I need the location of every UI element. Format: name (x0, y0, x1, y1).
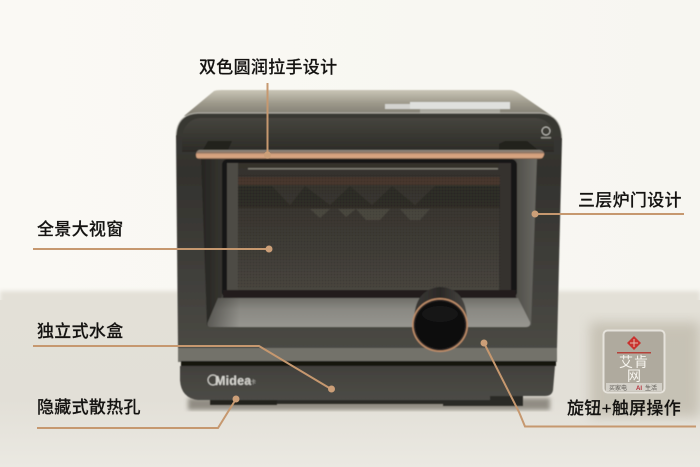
watermark logo: 网 (627, 368, 641, 384)
window mesh (238, 175, 500, 289)
watermark brand text: 艾肯 (619, 354, 649, 370)
watermark logo (604, 330, 664, 392)
door lower bevel (208, 298, 530, 327)
watermark tagline (606, 383, 662, 391)
base (180, 366, 555, 400)
label: vents: 隐藏式散热孔 (37, 398, 141, 417)
watermark logo: 买家电 (609, 384, 627, 392)
label: water box: 独立式水盒 (37, 322, 124, 341)
callout dots (232, 152, 538, 402)
brand logo: 凯卡 (245, 378, 257, 386)
black gap (181, 361, 556, 366)
window reflections (238, 186, 500, 208)
line: water box (33, 346, 331, 389)
label: door: 三层炉门设计 (578, 191, 682, 210)
lower front band (178, 348, 557, 362)
label: window: 全景大视窗 (37, 219, 124, 239)
watermark logo: 生活 (645, 384, 657, 392)
door side left (201, 158, 222, 326)
line: door (535, 213, 684, 215)
door side right (512, 158, 537, 326)
brand logo: Midea (215, 374, 252, 388)
handle recess left (203, 141, 232, 150)
oven top face (184, 90, 552, 116)
line: vents (37, 399, 236, 428)
handle (196, 150, 544, 159)
callout lines (33, 83, 696, 428)
knob (412, 287, 468, 352)
energy mark (541, 127, 551, 138)
line: handle (266, 83, 268, 155)
line: knob (484, 343, 696, 426)
label: handle: 双色圆润拉手设计 (199, 57, 337, 77)
oven feet (210, 392, 523, 406)
window glass (222, 159, 517, 298)
watermark diamond (627, 336, 641, 350)
top face label sticker (385, 102, 510, 113)
upper front panel (182, 118, 554, 152)
watermark logo: AI (636, 386, 642, 392)
handle recess right (499, 141, 538, 150)
front body (176, 113, 562, 348)
label: knob: 旋钮+触屏操作 (567, 399, 681, 418)
oven (176, 90, 562, 410)
oven shadow (188, 398, 550, 410)
line: window (33, 248, 269, 250)
